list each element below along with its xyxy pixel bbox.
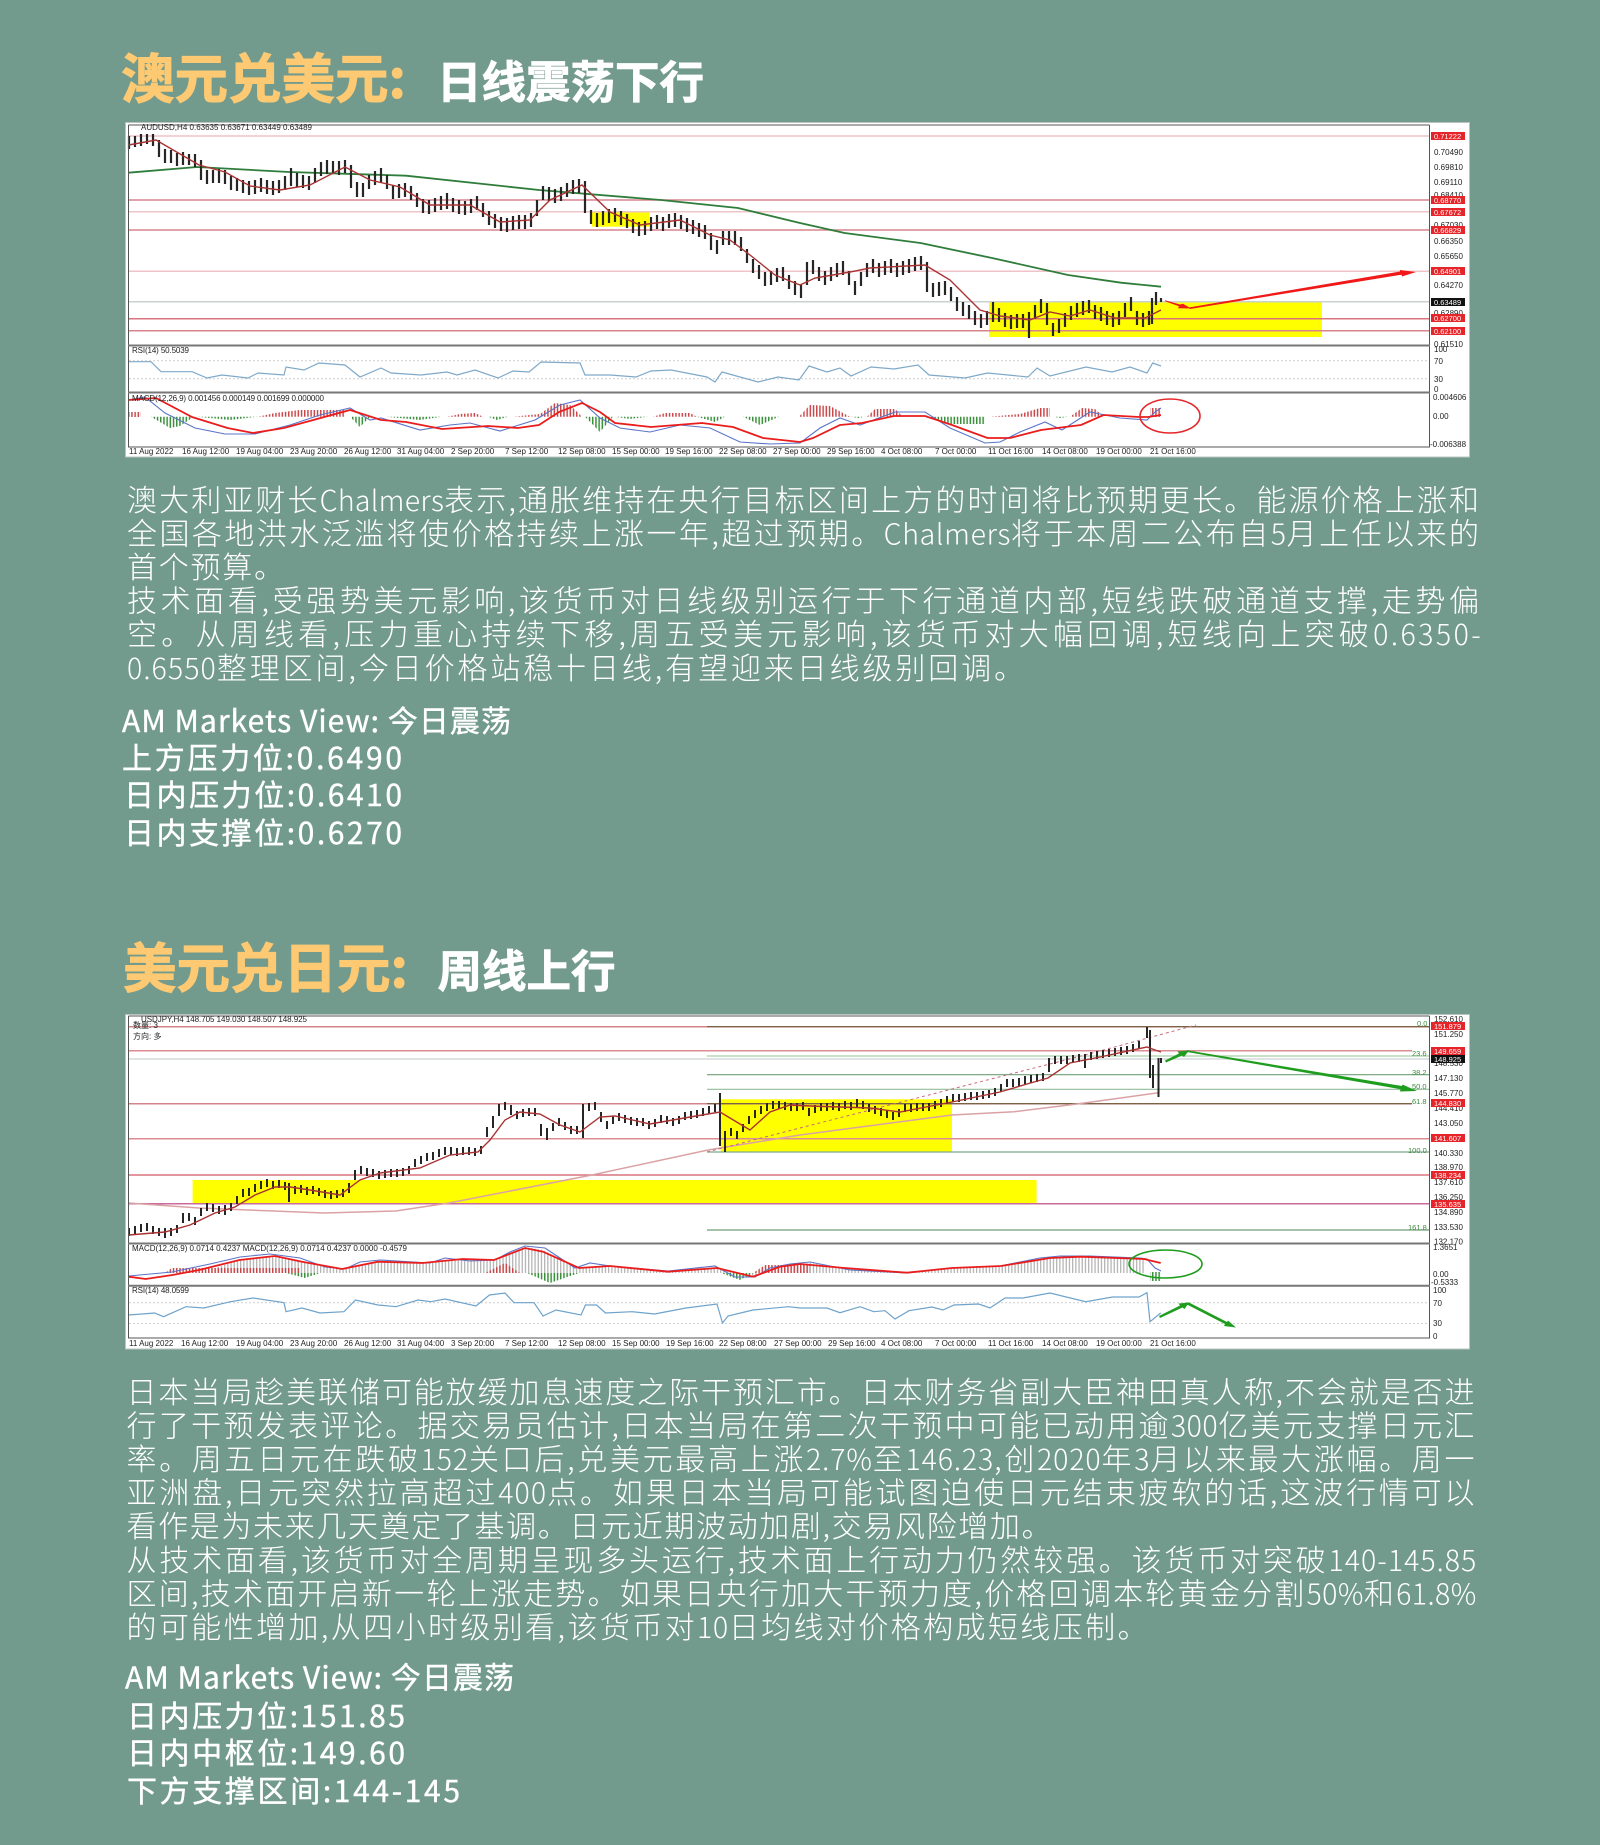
price tags: 138.234 — [1434, 1171, 1461, 1180]
date axis: 27 Sep 00:00 — [774, 1339, 822, 1348]
date axis: 19 Sep 16:00 — [665, 447, 713, 456]
text block: USD/JPY commentary: 看作是为未来几天奠定了基调。日元近期波动加剧,交易风险增加。 — [126, 1502, 1052, 1546]
price tags: 0.68770 — [1434, 196, 1461, 205]
date axis: 23 Aug 20:00 — [290, 1339, 338, 1348]
chart frame and separators — [128, 125, 1430, 447]
date axis: 26 Aug 12:00 — [344, 447, 392, 456]
price tags: 148.925 — [1434, 1055, 1461, 1064]
price tags: 0.62700 — [1434, 314, 1461, 323]
date axis: 15 Sep 00:00 — [612, 447, 660, 456]
MACD panel — [129, 394, 1200, 444]
price axis: 0.00 — [1433, 412, 1449, 421]
pink long moving average — [129, 1093, 1158, 1213]
price axis: 0.004606 — [1433, 393, 1467, 402]
date axis: 7 Oct 00:00 — [935, 447, 977, 456]
heading: AUD/USD — [121, 37, 704, 114]
text block: AUD/USD commentary: 技术面看,受强势美元影响,该货币对日线级别运行于下行通道内部,短线跌破通道支撑,走势偏 — [127, 577, 1479, 621]
text block: USD/JPY commentary — [126, 1368, 1476, 1647]
chart frame and separators — [128, 1016, 1430, 1338]
yellow zones — [592, 212, 1322, 337]
price axis: 70 — [1433, 1299, 1442, 1308]
price axis: 0.69810 — [1434, 163, 1463, 172]
market view: USD/JPY levels: 日内压力位:151.85 — [127, 1692, 405, 1736]
date axis: 15 Sep 00:00 — [612, 1339, 660, 1348]
heading: USD/JPY: 周线上行 — [438, 935, 616, 1000]
price axis: -0.5333 — [1431, 1278, 1459, 1287]
price axis: 0.67030 — [1434, 221, 1463, 230]
price axis: 148.530 — [1434, 1059, 1463, 1068]
price axis — [1431, 1015, 1463, 1341]
date axis: 31 Aug 04:00 — [397, 1339, 445, 1348]
price axis: 30 — [1433, 1319, 1442, 1328]
red circle callout — [1140, 399, 1200, 433]
dotted trend line — [707, 1025, 1196, 1152]
Fibonacci levels: 61.8 — [1412, 1097, 1427, 1106]
text block: AUD/USD commentary: 空。从周线看,压力重心持续下移,周五受美元影响,该货币对大幅回调,短线向上突破0.6350- — [127, 610, 1480, 654]
market view: AUD/USD levels: 上方压力位:0.6490 — [122, 734, 402, 778]
price axis: 138.970 — [1434, 1163, 1463, 1172]
price tags: 151.879 — [1434, 1022, 1461, 1031]
text block: USD/JPY commentary: 亚洲盘,日元突然拉高超过400点。如果日本当局可能试图迫使日元结束疲软的话,这波行情可以 — [126, 1468, 1474, 1512]
heading: USD/JPY — [123, 926, 616, 1004]
date axis: 16 Aug 12:00 — [181, 1339, 229, 1348]
date axis: 22 Sep 08:00 — [719, 1339, 767, 1348]
date axis: 23 Aug 20:00 — [290, 447, 338, 456]
Fibonacci levels: 100.0 — [1408, 1146, 1427, 1155]
date axis: 22 Sep 08:00 — [719, 447, 767, 456]
support and resistance lines — [129, 1027, 1430, 1204]
RSI panel: RSI(14) 48.0599 — [132, 1286, 190, 1295]
MACD panel: MACD(12,26,9) 0.0714 0.4237 MACD(12,26,9) 0.0714 0.4237 0.0000 -0.4579 — [132, 1244, 408, 1253]
heading: USD/JPY: 美元兑日元: — [123, 926, 408, 1004]
price axis: 136.250 — [1434, 1193, 1463, 1202]
price tags: 144.830 — [1434, 1099, 1461, 1108]
date axis: 7 Oct 00:00 — [935, 1339, 977, 1348]
candlesticks — [129, 1027, 1161, 1238]
text block: AUD/USD commentary: 澳大利亚财长Chalmers表示,通胀维持在央行目标区间上方的时间将比预期更长。能源价格上涨和 — [127, 476, 1479, 520]
date axis: 11 Oct 16:00 — [988, 1339, 1034, 1348]
price axis: 30 — [1434, 375, 1443, 384]
price axis: 137.610 — [1434, 1178, 1463, 1187]
price axis: 140.330 — [1434, 1149, 1463, 1158]
date axis: 4 Oct 08:00 — [881, 447, 923, 456]
red forecast arrow — [1165, 270, 1416, 309]
support and resistance lines — [129, 136, 1430, 331]
price axis: -0.006388 — [1430, 440, 1467, 449]
date axis: 19 Aug 04:00 — [236, 447, 284, 456]
market view: USD/JPY levels: 下方支撑区间:144-145 — [127, 1767, 460, 1811]
price tags: 149.659 — [1434, 1047, 1461, 1056]
red 10-day moving average — [129, 1047, 1161, 1235]
price axis: 0.64270 — [1434, 281, 1463, 290]
text block: USD/JPY commentary: 从技术面看,该货币对全周期呈现多头运行,技术面上行动力仍然较强。该货币对突破140-145.85 — [126, 1536, 1475, 1580]
date axis: 19 Oct 00:00 — [1096, 447, 1142, 456]
price tags — [1431, 1022, 1465, 1209]
price axis: 145.770 — [1434, 1089, 1463, 1098]
price axis: 151.250 — [1434, 1030, 1463, 1039]
RSI panel: RSI(14) 50.5039 — [132, 346, 190, 355]
date axis: 12 Sep 08:00 — [558, 447, 606, 456]
date axis: 11 Aug 2022 — [129, 1339, 174, 1348]
price axis: 0.68410 — [1434, 191, 1463, 200]
price tags: 0.64901 — [1434, 267, 1461, 276]
red 10-day moving average — [129, 140, 1161, 320]
RSI panel — [129, 346, 1430, 382]
date axis: 11 Aug 2022 — [129, 447, 174, 456]
price tags: 0.66829 — [1434, 226, 1461, 235]
market view: AUD/USD levels: AM Markets View: 今日震荡 — [122, 697, 511, 741]
price tags: 0.63489 — [1434, 298, 1461, 307]
text block: AUD/USD commentary — [127, 476, 1480, 688]
price tags: 141.607 — [1434, 1134, 1461, 1143]
price axis: 70 — [1434, 357, 1443, 366]
date axis: 19 Aug 04:00 — [236, 1339, 284, 1348]
market view: USD/JPY levels — [125, 1654, 514, 1811]
text block: USD/JPY commentary: 日本当局趁美联储可能放缓加息速度之际干预汇市。日本财务省副大臣神田真人称,不会就是否进 — [126, 1368, 1474, 1412]
chart header — [133, 1015, 308, 1041]
date axis — [129, 1339, 1196, 1348]
price axis: 100 — [1433, 1286, 1447, 1295]
date axis: 26 Aug 12:00 — [344, 1339, 392, 1348]
green moving average — [129, 167, 1161, 287]
chart header: 数量: 3 — [133, 1020, 158, 1030]
date axis: 4 Oct 08:00 — [881, 1339, 923, 1348]
date axis: 29 Sep 16:00 — [828, 1339, 876, 1348]
market view: AUD/USD levels — [122, 697, 511, 853]
price axis: 133.530 — [1434, 1223, 1463, 1232]
Fibonacci levels: 50.0 — [1412, 1082, 1427, 1091]
heading: AUD/USD: 日线震荡下行 — [437, 46, 704, 111]
date axis: 21 Oct 16:00 — [1150, 447, 1196, 456]
Fibonacci levels: 23.6 — [1412, 1049, 1427, 1058]
price axis: 0 — [1433, 1332, 1438, 1341]
price axis: 152.610 — [1434, 1015, 1463, 1024]
price axis: 0.00 — [1433, 1270, 1449, 1279]
candlesticks — [129, 134, 1161, 338]
price axis: 134.890 — [1434, 1208, 1463, 1217]
green RSI arrow — [1159, 1302, 1236, 1328]
chart: AUD/USD H4 — [126, 122, 1470, 457]
date axis — [129, 447, 1196, 456]
price axis: 0.69110 — [1434, 178, 1463, 187]
text block: USD/JPY commentary: 行了干预发表评论。据交易员估计,日本当局在第二次干预中可能已动用逾300亿美元支撑日元汇 — [126, 1402, 1474, 1446]
price axis: 0 — [1434, 385, 1439, 394]
price tags — [1431, 132, 1465, 336]
chart: USD/JPY H4 — [126, 1014, 1470, 1349]
text block: AUD/USD commentary: 首个预算。 — [127, 543, 284, 587]
price axis: 143.050 — [1434, 1119, 1463, 1128]
market view: AUD/USD levels: 日内支撑位:0.6270 — [124, 809, 402, 853]
MACD panel — [129, 1244, 1202, 1283]
date axis: 21 Oct 16:00 — [1150, 1339, 1196, 1348]
date axis: 29 Sep 16:00 — [827, 447, 875, 456]
green forecast arrow — [1165, 1050, 1417, 1092]
date axis: 14 Oct 08:00 — [1042, 447, 1088, 456]
market view: USD/JPY levels: AM Markets View: 今日震荡 — [125, 1654, 514, 1698]
price axis: 100 — [1434, 345, 1448, 354]
date axis: 3 Sep 20:00 — [451, 1339, 495, 1348]
price axis: 0.70490 — [1434, 148, 1463, 157]
date axis: 19 Oct 00:00 — [1096, 1339, 1142, 1348]
text block: USD/JPY commentary: 的可能性增加,从四小时级别看,该货币对10日均线对价格构成短线压制。 — [126, 1603, 1148, 1647]
Fibonacci levels: 0.0 — [1417, 1019, 1427, 1028]
price axis — [1430, 148, 1467, 449]
text block: AUD/USD commentary: 0.6550整理区间,今日价格站稳十日线,有望迎来日线级别回调。 — [127, 644, 1024, 688]
date axis: 27 Sep 00:00 — [773, 447, 821, 456]
price axis: 144.410 — [1434, 1104, 1463, 1113]
green ellipse callout — [1129, 1250, 1202, 1278]
date axis: 16 Aug 12:00 — [182, 447, 230, 456]
price tags: 0.67672 — [1434, 208, 1461, 217]
Fibonacci levels: 38.2 — [1412, 1068, 1427, 1077]
price tags: 135.635 — [1434, 1200, 1461, 1209]
price tags: 0.62100 — [1434, 327, 1461, 336]
date axis: 14 Oct 08:00 — [1042, 1339, 1088, 1348]
chart header: USDJPY,H4 148.705 149.030 148.507 148.925 — [141, 1015, 308, 1024]
price axis: 0.65650 — [1434, 252, 1463, 261]
Fibonacci levels — [707, 1019, 1429, 1232]
market view: AUD/USD levels: 日内压力位:0.6410 — [124, 771, 402, 815]
date axis: 19 Sep 16:00 — [666, 1339, 714, 1348]
text block: AUD/USD commentary: 全国各地洪水泛滥将使价格持续上涨一年,超过预期。Chalmers将于本周二公布自5月上任以来的 — [127, 510, 1479, 554]
price axis: 132.170 — [1434, 1238, 1463, 1246]
market view: USD/JPY levels: 日内中枢位:149.60 — [127, 1729, 405, 1773]
chart header: 方向: 多 — [133, 1031, 161, 1041]
date axis: 2 Sep 20:00 — [451, 447, 495, 456]
date axis: 31 Aug 04:00 — [397, 447, 445, 456]
price axis: 1.3651 — [1433, 1243, 1458, 1252]
Fibonacci levels: 161.8 — [1408, 1223, 1427, 1232]
MACD panel: MACD(12,26,9) 0.001456 0.000149 0.001699 0.000000 — [132, 394, 325, 403]
RSI panel — [129, 1286, 1430, 1328]
date axis: 7 Sep 12:00 — [505, 447, 549, 456]
heading: AUD/USD: 澳元兑美元: — [121, 37, 406, 114]
price axis: 0.61510 — [1434, 340, 1463, 349]
price tags: 0.71222 — [1434, 132, 1461, 141]
date axis: 7 Sep 12:00 — [505, 1339, 549, 1348]
date axis: 12 Sep 08:00 — [558, 1339, 606, 1348]
chart header: AUDUSD,H4 0.63635 0.63671 0.63449 0.63489 — [141, 123, 313, 132]
text block: USD/JPY commentary: 区间,技术面开启新一轮上涨走势。如果日央行加大干预力度,价格回调本轮黄金分割50%和61.8% — [126, 1570, 1476, 1614]
date axis: 11 Oct 16:00 — [988, 447, 1034, 456]
price axis: 147.130 — [1434, 1074, 1463, 1083]
text block: USD/JPY commentary: 率。周五日元在跌破152关口后,兑美元最高上涨2.7%至146.23,创2020年3月以来最大涨幅。周一 — [126, 1435, 1474, 1479]
price axis: 0.66350 — [1434, 237, 1463, 246]
yellow zones — [193, 1099, 1037, 1204]
price axis: 0.62890 — [1434, 309, 1463, 318]
